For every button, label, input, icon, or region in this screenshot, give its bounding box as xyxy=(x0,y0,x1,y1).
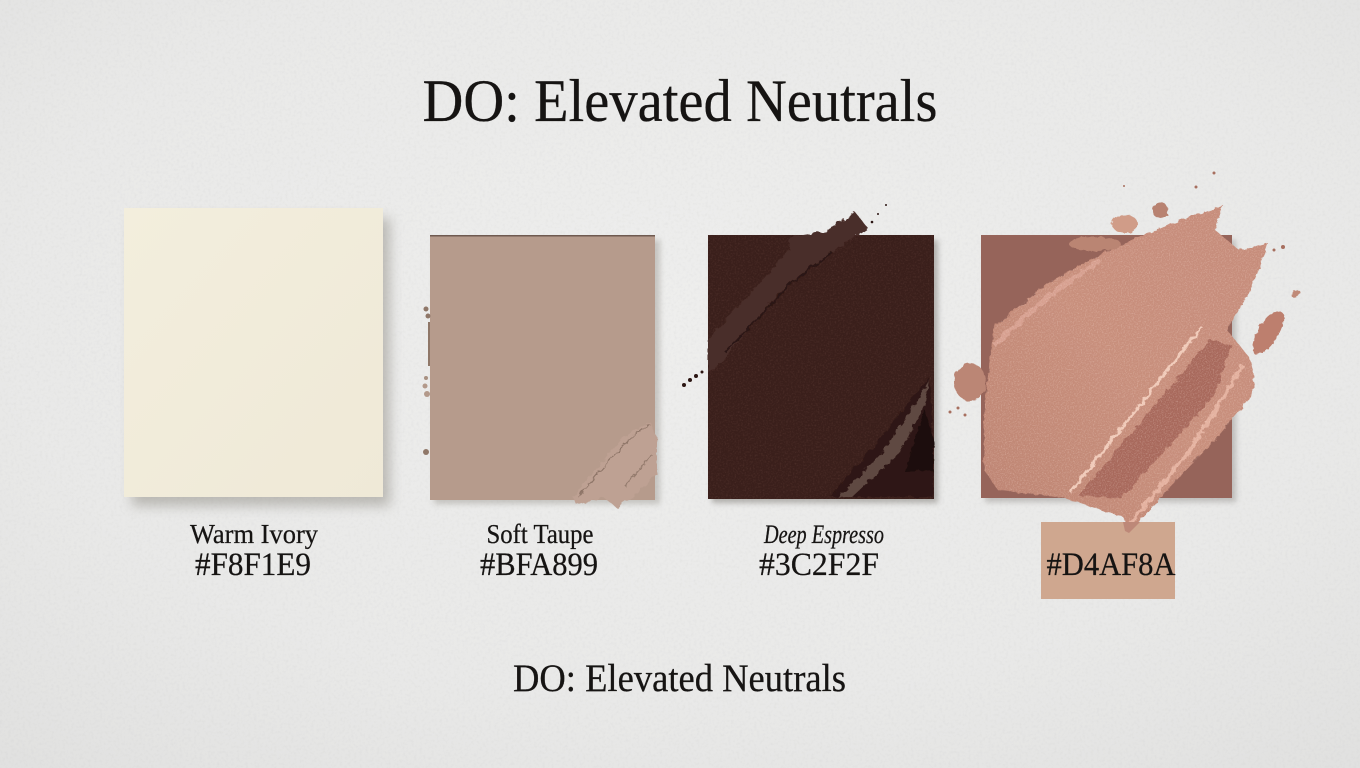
label: deep espresso: #3C2F2F xyxy=(759,547,879,583)
swatch: warm ivory paper xyxy=(124,208,390,506)
taupe smear corner xyxy=(573,422,657,508)
metallic dust xyxy=(948,172,1285,416)
label: deep espresso xyxy=(759,520,884,583)
swatch: deep espresso xyxy=(682,204,938,503)
powder spill xyxy=(954,202,1302,401)
highlight streaks xyxy=(1070,327,1202,492)
label: soft taupe: Soft Taupe xyxy=(486,519,594,549)
label: soft taupe xyxy=(480,519,598,583)
label: deep espresso: Deep Espresso xyxy=(763,520,884,549)
espresso lower smear xyxy=(831,377,934,497)
metallic smear xyxy=(984,205,1268,533)
title: DO: Elevated Neutrals xyxy=(422,68,938,134)
hex chip: D4AF8A xyxy=(1041,522,1176,599)
swatch: soft taupe xyxy=(422,235,660,508)
taupe left flakes xyxy=(422,306,430,455)
espresso dust xyxy=(682,204,887,387)
exposed band xyxy=(1078,340,1232,498)
label: warm ivory: #F8F1E9 xyxy=(195,547,311,583)
footer caption: DO: Elevated Neutrals xyxy=(513,657,846,700)
label: warm ivory: Warm Ivory xyxy=(190,519,318,549)
espresso upper smear xyxy=(708,212,868,373)
swatch: metallic rose with smear xyxy=(948,172,1302,540)
hex chip: D4AF8A: #D4AF8A xyxy=(1046,547,1176,583)
smear sparkle xyxy=(980,200,1270,540)
label: warm ivory xyxy=(190,519,318,583)
label: soft taupe: #BFA899 xyxy=(480,547,598,583)
